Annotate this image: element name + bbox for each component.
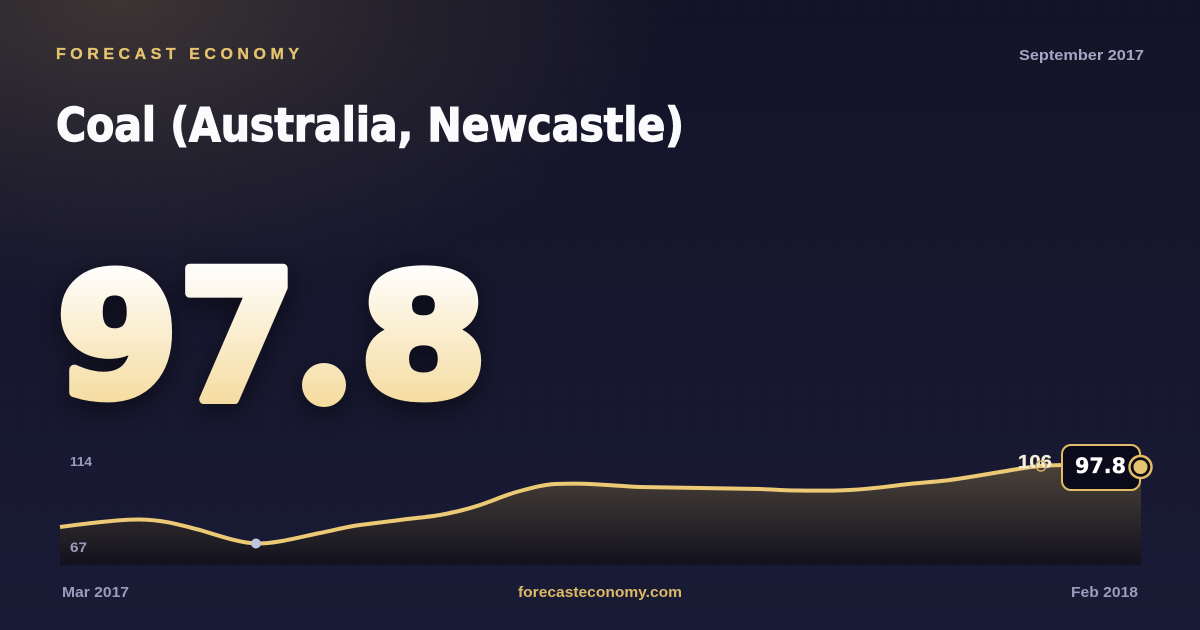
current point marker (1130, 456, 1152, 478)
high value label: 106 (1018, 452, 1052, 472)
end date: Feb 2018 (1071, 584, 1138, 601)
low point marker (251, 538, 261, 548)
price line (60, 465, 1064, 544)
high point marker (1036, 461, 1046, 471)
date: September 2017 (1019, 47, 1144, 64)
axis max label: 114 (70, 454, 93, 469)
big value (57, 230, 487, 444)
area fill (60, 465, 1141, 565)
big value: 9 (57, 239, 178, 435)
brand label: FORECAST ECONOMY (56, 46, 299, 63)
start date: Mar 2017 (62, 584, 129, 601)
current value badge: 97.8 (1075, 454, 1126, 478)
big value: 7 (178, 234, 297, 442)
website: forecasteconomy.com (518, 584, 682, 601)
big value: 8 (360, 239, 487, 435)
axis min label: 67 (70, 539, 87, 555)
title: Coal (Australia, Newcastle) (56, 98, 684, 152)
chart (60, 445, 1152, 565)
current value badge (1062, 445, 1140, 490)
